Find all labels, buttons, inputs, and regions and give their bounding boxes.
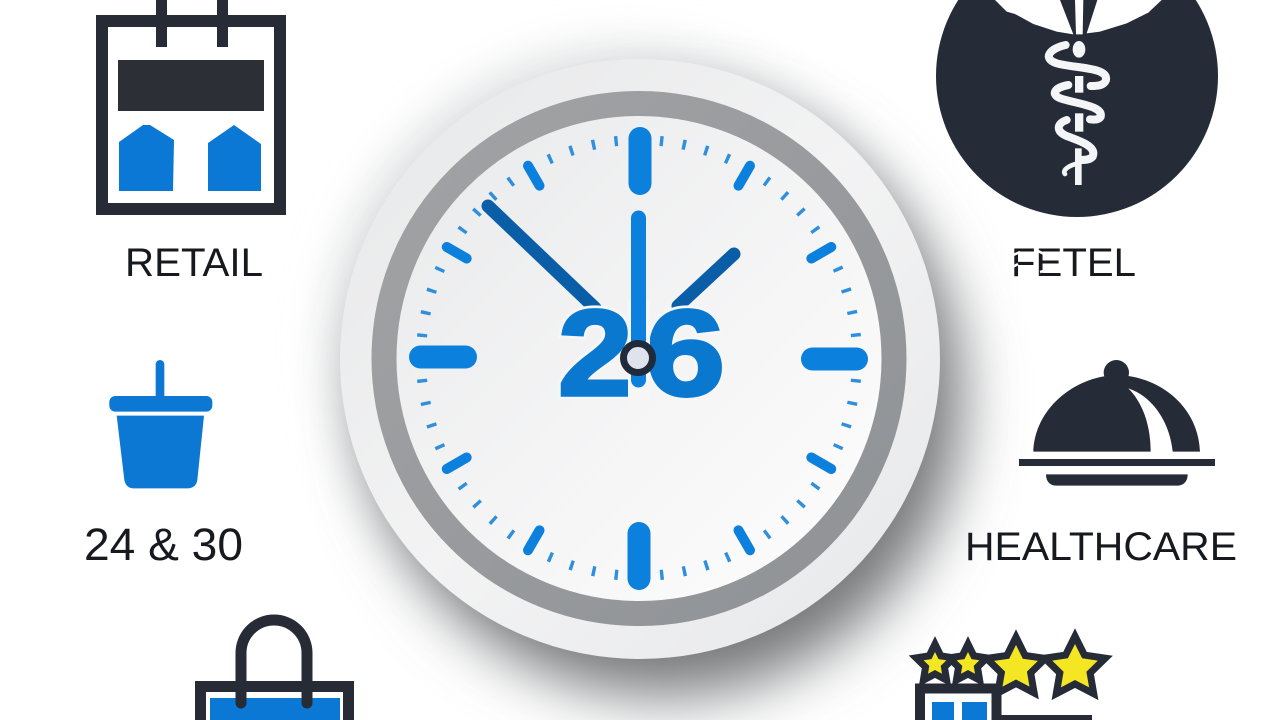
- icon: drink cup: [109, 360, 212, 488]
- number 26: 6: [645, 285, 725, 422]
- number 26: 2: [558, 286, 633, 422]
- clock hands: [488, 206, 734, 308]
- icon: medical caduceus: [936, 0, 1218, 217]
- number 26: 2: [558, 286, 633, 422]
- label: retail: RETAIL: [125, 241, 263, 285]
- center hub: [624, 344, 652, 372]
- label: 24 and 30: 24 & 30: [84, 519, 243, 570]
- number 26: [558, 285, 725, 422]
- label: healthcare: HEALTHCARE: [965, 525, 1237, 569]
- label: hotel: FETEL: [1011, 241, 1136, 285]
- center hand: [631, 218, 646, 380]
- number 26: 6: [645, 285, 725, 422]
- icon: hotel with star rating: [920, 644, 1098, 720]
- clock: [328, 45, 962, 696]
- icon: retail store: [102, 0, 280, 209]
- minute ticks: [421, 140, 857, 576]
- icon: shopping bag: [200, 620, 348, 720]
- rating stars: [924, 644, 1098, 687]
- icon: food cloche: [1019, 360, 1215, 486]
- hour ticks: [420, 138, 856, 578]
